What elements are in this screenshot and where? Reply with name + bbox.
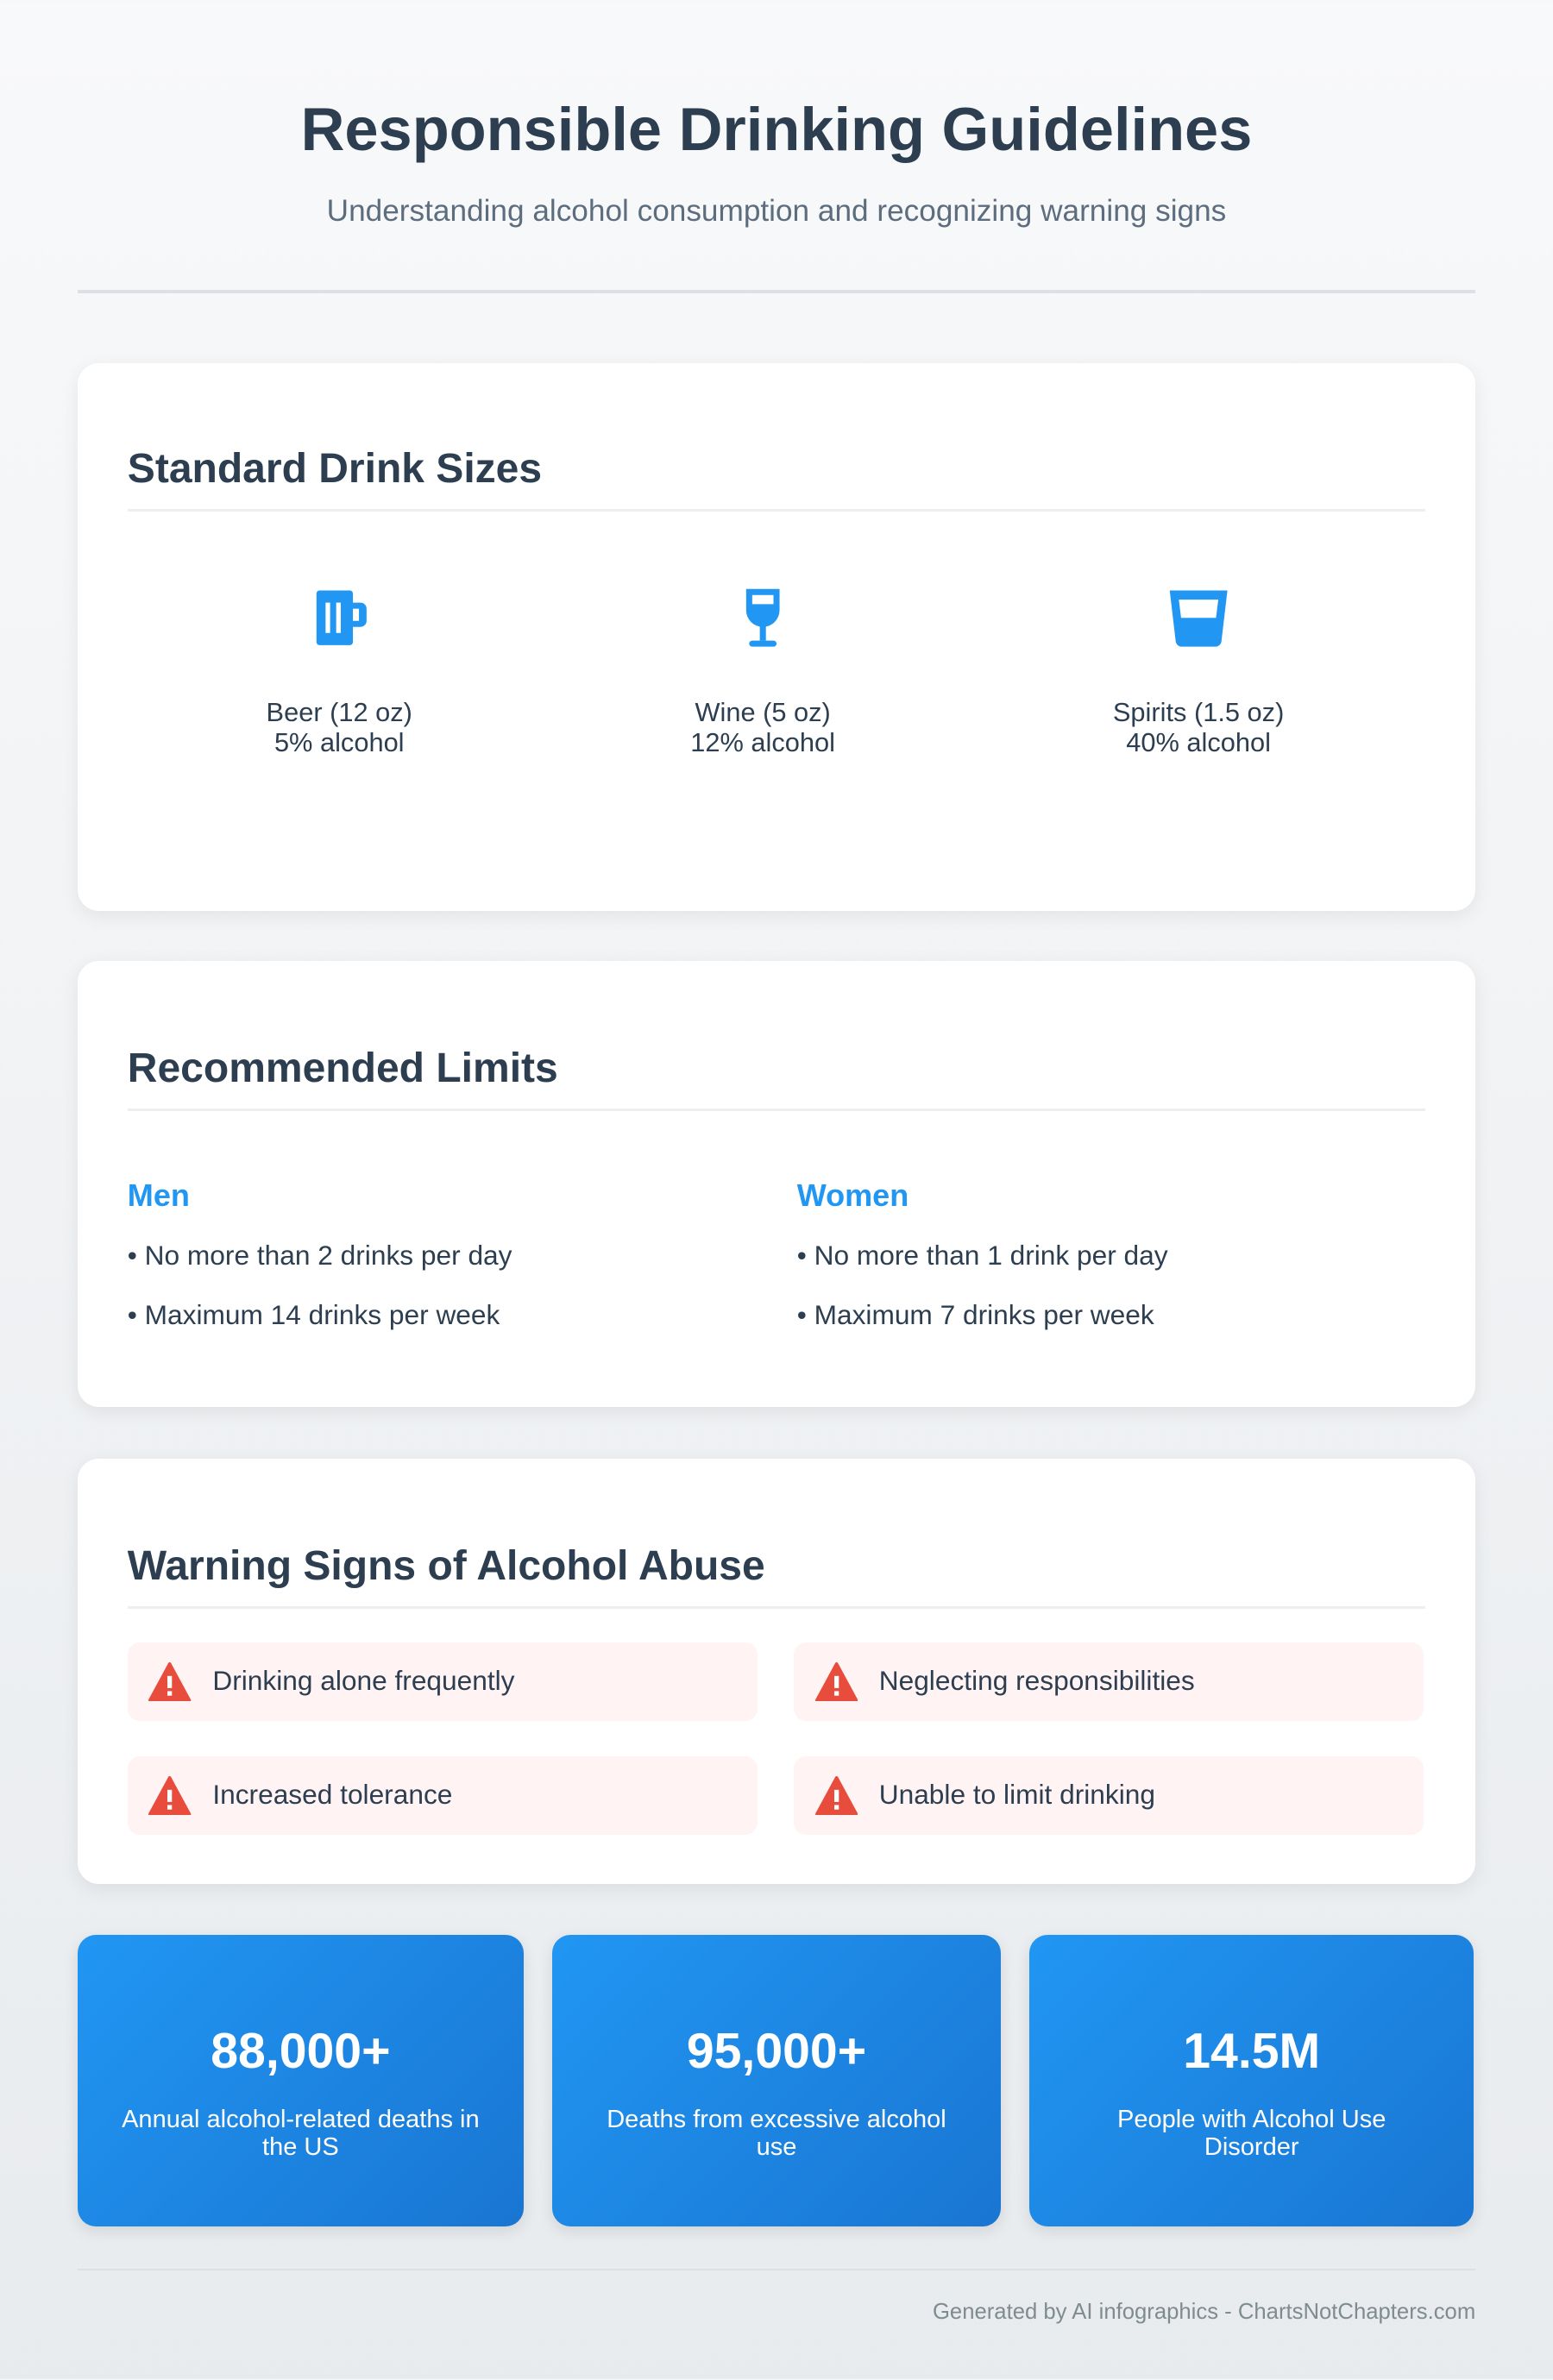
stat: deaths 88,000+: Annual alcohol-related deaths in the US bbox=[122, 2106, 480, 2161]
column: women: • Maximum 7 drinks per week bbox=[797, 1299, 1154, 1330]
stat: 14.5M: People with Alcohol Use Disorder bbox=[1117, 2106, 1386, 2161]
stat: 14.5M bbox=[1029, 1935, 1474, 2226]
warning: drinking alone bbox=[128, 1642, 758, 1721]
column: women: Women bbox=[797, 1177, 909, 1213]
drink: beer: 5% alcohol bbox=[274, 727, 405, 757]
heading: recommended limits bbox=[128, 1045, 1425, 1111]
column: women bbox=[797, 1177, 1168, 1330]
heading: warning signs: Warning Signs of Alcohol Abuse bbox=[128, 1543, 765, 1589]
warning: drinking alone: Drinking alone frequently bbox=[212, 1665, 515, 1696]
icon: beer mug bbox=[316, 590, 367, 645]
drink: spirits bbox=[1113, 590, 1284, 757]
footer: Generated by AI infographics - ChartsNotChapters.com bbox=[933, 2300, 1475, 2324]
warning: unable to limit: Unable to limit drinking bbox=[879, 1779, 1155, 1810]
panel: standard drink sizes bbox=[78, 363, 1475, 911]
stat: deaths 88,000+ bbox=[78, 1935, 524, 2226]
column: women: • No more than 1 drink per day bbox=[797, 1240, 1168, 1271]
drink: beer: Beer (12 oz) bbox=[267, 697, 412, 727]
subtitle: Understanding alcohol consumption and recognizing warning signs bbox=[327, 194, 1226, 228]
stat: deaths 95,000+: Deaths from excessive alcohol use bbox=[607, 2106, 946, 2161]
heading: warning signs bbox=[128, 1542, 1425, 1609]
warning: increased tolerance bbox=[128, 1756, 758, 1835]
column: men: Men bbox=[128, 1177, 190, 1213]
stat: 14.5M: 14.5M bbox=[1183, 2024, 1320, 2079]
heading: recommended limits: Recommended Limits bbox=[128, 1046, 558, 1091]
drink: spirits: 40% alcohol bbox=[1126, 727, 1271, 757]
column: men bbox=[128, 1177, 512, 1330]
drink: wine bbox=[690, 588, 835, 757]
heading: standard drink sizes bbox=[128, 445, 1425, 512]
drink: wine: Wine (5 oz) bbox=[695, 697, 831, 727]
warning: neglecting responsibilities bbox=[794, 1642, 1424, 1721]
stat: deaths 88,000+: 88,000+ bbox=[211, 2024, 390, 2079]
heading: standard drink sizes: Standard Drink Sizes bbox=[128, 446, 542, 492]
panel: recommended limits bbox=[78, 961, 1475, 1407]
drink: wine: 12% alcohol bbox=[690, 727, 835, 757]
icon: wine glass bbox=[745, 588, 780, 647]
icon: shot glass bbox=[1170, 590, 1228, 647]
warning: increased tolerance: Increased tolerance bbox=[212, 1779, 452, 1810]
drink: beer bbox=[267, 590, 412, 757]
warning: neglecting responsibilities: Neglecting responsibilities bbox=[879, 1665, 1195, 1696]
column: men: • Maximum 14 drinks per week bbox=[128, 1299, 500, 1330]
stat: deaths 95,000+: 95,000+ bbox=[687, 2024, 866, 2079]
stat: deaths 95,000+ bbox=[552, 1935, 1001, 2226]
panel: warning signs bbox=[78, 1459, 1475, 1884]
title: Responsible Drinking Guidelines bbox=[301, 95, 1252, 163]
column: men: • No more than 2 drinks per day bbox=[128, 1240, 512, 1271]
drink: spirits: Spirits (1.5 oz) bbox=[1113, 697, 1284, 727]
warning: unable to limit bbox=[794, 1756, 1424, 1835]
